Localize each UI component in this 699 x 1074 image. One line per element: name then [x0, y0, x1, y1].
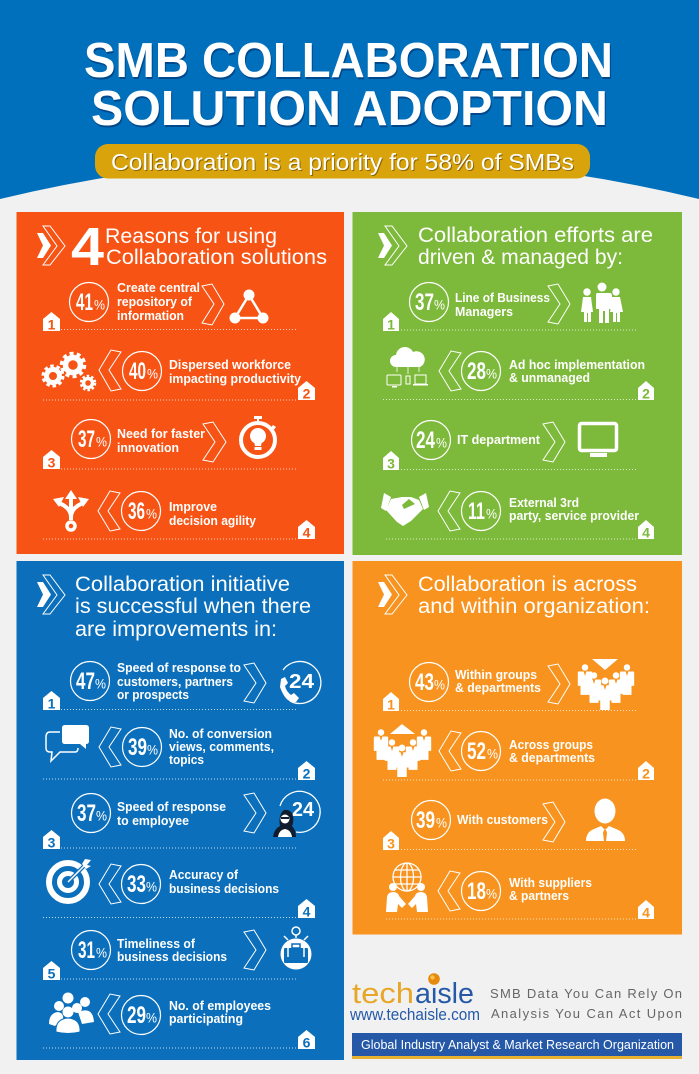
row 1	[383, 282, 636, 332]
subtitle pill	[95, 144, 590, 178]
icon: three people	[581, 282, 623, 323]
rank tag: 2	[303, 386, 311, 402]
chevron	[98, 994, 120, 1034]
heading	[418, 223, 653, 269]
rank tag	[638, 520, 654, 540]
chevron	[203, 422, 226, 462]
rank tag	[298, 1030, 315, 1050]
chevron	[548, 664, 570, 704]
row 3	[43, 416, 296, 470]
row 1	[383, 659, 636, 712]
rank tag	[383, 831, 399, 852]
row 2	[374, 724, 654, 782]
label: IT department	[457, 433, 541, 447]
rank tag: 2	[642, 386, 650, 402]
icon: handshake	[381, 493, 429, 526]
label	[509, 738, 595, 765]
rank tag: 1	[48, 696, 56, 712]
label: Dispersed workforce	[169, 358, 291, 372]
label: & unmanaged	[509, 371, 590, 385]
rank tag: 4	[642, 524, 650, 540]
percent badge	[72, 930, 110, 970]
organization banner	[352, 1033, 682, 1059]
label: Speed of response to	[117, 661, 241, 675]
rank tag: 3	[48, 834, 56, 850]
rank tag	[638, 381, 654, 402]
icon: gears	[43, 354, 95, 390]
label: Within groups	[455, 668, 537, 682]
rank tag: 4	[642, 904, 650, 920]
chevron	[202, 284, 224, 325]
heading: are improvements in:	[75, 617, 277, 641]
percent badge: %	[486, 506, 497, 522]
chevron	[543, 802, 565, 842]
rank tag: 1	[48, 316, 56, 332]
label	[455, 291, 550, 319]
icon: group with down triangle	[578, 659, 634, 710]
row 6	[43, 992, 315, 1050]
percent badge: 33	[127, 871, 146, 898]
label: Improve	[169, 500, 217, 514]
label	[117, 661, 241, 702]
label	[117, 937, 227, 964]
chevron header icon	[378, 226, 407, 265]
rank tag	[383, 312, 399, 332]
percent badge: 52	[467, 738, 486, 765]
rank tag: 5	[48, 966, 56, 982]
label	[117, 427, 205, 455]
row 3	[383, 798, 636, 852]
icon: 24 hour support agent	[273, 791, 320, 837]
percent badge	[72, 794, 110, 832]
tagline	[490, 986, 682, 1021]
percent badge	[412, 420, 450, 460]
row 2	[383, 347, 654, 402]
row 2	[43, 350, 315, 402]
label: topics	[169, 753, 204, 767]
percent badge: %	[434, 296, 445, 312]
label: impacting productivity	[169, 372, 301, 386]
rank tag: 3	[387, 456, 395, 472]
rank tag	[298, 761, 315, 782]
percent badge: 24	[416, 427, 435, 454]
chevron	[98, 491, 120, 531]
chevron	[244, 930, 266, 970]
percent badge: 36	[128, 498, 145, 525]
rank tag	[298, 520, 315, 540]
chevron header icon	[378, 575, 407, 614]
icon: cloud and devices	[387, 347, 428, 388]
percent badge	[462, 352, 500, 390]
percent badge: 37	[415, 289, 434, 316]
percent badge	[122, 492, 160, 530]
percent badge	[410, 282, 448, 322]
logo	[349, 973, 480, 1024]
percent badge: 40	[129, 358, 146, 385]
heading: and within organization:	[418, 594, 650, 618]
rank tag: 1	[387, 696, 395, 712]
percent badge	[462, 492, 500, 530]
icon: globe and handshake	[386, 863, 428, 912]
percent badge: %	[147, 366, 158, 382]
percent badge: 37	[78, 426, 95, 453]
organization banner: Global Industry Analyst & Market Research Organization	[361, 1038, 674, 1052]
label: participating	[169, 1012, 243, 1026]
label	[169, 868, 279, 896]
percent badge: %	[487, 746, 498, 762]
label: business decisions	[117, 950, 227, 964]
percent badge: 29	[127, 1002, 146, 1029]
heading	[418, 572, 650, 618]
tagline: SMB Data You Can Rely On	[490, 986, 682, 1001]
row 1	[43, 281, 296, 332]
heading: Collaboration initiative	[75, 572, 290, 596]
label: Across groups	[509, 738, 593, 752]
rank tag	[383, 692, 399, 712]
rank tag	[43, 450, 60, 470]
chevron	[438, 871, 460, 911]
rank tag	[298, 899, 315, 920]
rank tag	[43, 691, 60, 712]
heading: driven & managed by:	[418, 245, 623, 269]
percent badge	[412, 800, 450, 840]
logo: aisle	[415, 978, 474, 1010]
percent badge: 18	[467, 878, 486, 905]
rank tag: 4	[303, 524, 311, 540]
label: With suppliers	[509, 876, 592, 890]
rank tag: 3	[48, 454, 56, 470]
chevron header icon	[37, 575, 65, 614]
label	[509, 876, 592, 903]
heading: 4	[71, 217, 104, 277]
icon: 24 hour support agent: 24	[292, 799, 315, 821]
chevron header icon	[37, 226, 65, 265]
panel: efforts driven and managed by	[352, 212, 682, 555]
header background	[0, 0, 699, 199]
icon: 24 hour phone	[280, 661, 321, 703]
label: or prospects	[117, 688, 189, 702]
rank tag	[638, 761, 654, 782]
label: Create central	[117, 281, 200, 295]
icon: network triangle	[230, 290, 268, 324]
row 2	[43, 725, 315, 782]
label: party, service provider	[509, 509, 639, 523]
title	[84, 34, 613, 136]
label	[169, 358, 301, 386]
chevron	[548, 284, 570, 324]
label: & departments	[455, 681, 541, 695]
rank tag: 2	[642, 766, 650, 782]
heading	[71, 217, 327, 277]
row 3	[43, 791, 320, 850]
label	[169, 999, 271, 1026]
chevron	[99, 727, 121, 767]
label	[509, 358, 645, 385]
percent badge: %	[434, 676, 445, 692]
label: Managers	[455, 305, 513, 319]
rank tag	[638, 900, 654, 920]
heading: Collaboration is across	[418, 572, 637, 596]
label: Need for faster	[117, 427, 205, 441]
heading: Reasons for using	[105, 224, 277, 248]
row 1	[43, 661, 321, 712]
percent badge	[410, 662, 448, 702]
label: to employee	[117, 814, 189, 828]
percent badge: 43	[415, 669, 434, 696]
percent badge: %	[486, 366, 497, 382]
percent badge: %	[436, 814, 447, 830]
label	[117, 281, 200, 323]
rank tag	[298, 381, 315, 402]
chevron	[438, 491, 460, 531]
label	[169, 500, 256, 528]
percent badge: %	[146, 878, 157, 894]
logo: www.techaisle.com	[349, 1005, 480, 1024]
percent badge	[462, 872, 500, 910]
label: No. of conversion	[169, 727, 272, 741]
label: Line of Business	[455, 291, 550, 305]
label: Accuracy of	[169, 868, 239, 882]
tagline: Analysis You Can Act Upon	[491, 1006, 682, 1021]
chevron	[439, 731, 461, 771]
label: With customers	[457, 813, 548, 827]
percent badge: 39	[128, 734, 147, 761]
label: business decisions	[169, 882, 279, 896]
rank tag: 3	[387, 836, 395, 852]
icon: target with arrow	[49, 859, 91, 901]
label: Timeliness of	[117, 937, 196, 951]
rank tag: 4	[303, 904, 311, 920]
icon: group of people	[49, 992, 94, 1034]
footer: techaisle branding	[349, 973, 682, 1059]
percent badge: %	[147, 742, 158, 758]
percent badge	[122, 864, 160, 904]
panel: initiative success improvements	[16, 561, 344, 1060]
percent badge: %	[96, 434, 107, 450]
icon: group with up triangle	[374, 724, 431, 777]
icon: stopwatch with briefcase	[280, 927, 312, 970]
label	[455, 668, 541, 695]
label: views, comments,	[169, 740, 274, 754]
label: information	[117, 309, 184, 323]
percent badge: %	[146, 1010, 157, 1026]
percent badge	[72, 420, 110, 458]
chevron	[99, 864, 121, 904]
percent badge: %	[146, 506, 157, 522]
icon: monitor	[580, 424, 616, 457]
percent badge: %	[96, 944, 107, 960]
rank tag: 2	[303, 766, 311, 782]
chevron	[99, 350, 121, 391]
percent badge: 47	[76, 668, 95, 695]
label: decision agility	[169, 514, 256, 528]
percent badge	[70, 662, 110, 700]
chevron	[543, 422, 565, 462]
percent badge	[70, 282, 108, 322]
label: No. of employees	[169, 999, 271, 1013]
label: External 3rd	[509, 496, 579, 510]
heading: is successful when there	[75, 594, 311, 618]
label: innovation	[117, 441, 179, 455]
label: customers, partners	[117, 675, 233, 689]
icon: business man	[586, 798, 625, 841]
label: repository of	[117, 295, 193, 309]
percent badge: 31	[78, 937, 95, 964]
percent badge: 11	[468, 498, 485, 525]
heading: Collaboration solutions	[106, 245, 327, 269]
percent badge	[462, 732, 500, 770]
rank tag	[383, 451, 399, 472]
title: SOLUTION ADOPTION	[91, 82, 608, 136]
label	[117, 800, 226, 828]
label: Ad hoc implementation	[509, 358, 645, 372]
rank tag	[43, 830, 60, 850]
logo: tech	[352, 978, 414, 1010]
rank tag	[43, 961, 60, 982]
subtitle pill: Collaboration is a priority for 58% of SMBs	[111, 149, 574, 175]
heading	[75, 572, 311, 641]
percent badge	[122, 352, 162, 390]
heading: Collaboration efforts are	[418, 223, 653, 247]
row 4	[43, 490, 315, 540]
chevron	[244, 663, 266, 703]
row 4	[386, 863, 654, 920]
label: & partners	[509, 889, 569, 903]
icon: stopwatch with bulb	[241, 416, 276, 457]
icon: diverging arrows	[53, 490, 89, 530]
percent badge: %	[96, 808, 107, 824]
percent badge	[122, 728, 162, 766]
row 4	[381, 491, 654, 540]
chevron	[244, 793, 266, 833]
percent badge: 37	[77, 800, 96, 827]
row 4	[43, 859, 315, 920]
icon: chat bubbles	[46, 725, 89, 761]
percent badge: %	[95, 676, 106, 692]
rank tag: 1	[387, 316, 395, 332]
title: SMB COLLABORATION	[84, 34, 613, 88]
label: & departments	[509, 751, 595, 765]
percent badge	[122, 996, 160, 1034]
rank tag: 6	[303, 1034, 311, 1050]
chevron	[439, 351, 461, 391]
label	[509, 496, 639, 523]
rank tag	[43, 312, 60, 332]
percent badge: 39	[416, 807, 435, 834]
row 3	[383, 420, 636, 472]
percent badge: 28	[467, 358, 486, 385]
panel: across and within organization	[352, 561, 682, 934]
icon: 24 hour phone: 24	[289, 671, 315, 693]
label	[169, 727, 274, 767]
percent badge: %	[436, 434, 447, 450]
panel: reasons for using collaboration solutions	[16, 212, 344, 554]
percent badge: %	[486, 886, 497, 902]
label: Speed of response	[117, 800, 226, 814]
percent badge: %	[94, 296, 105, 312]
row 5	[43, 927, 312, 982]
percent badge: 41	[76, 289, 93, 316]
